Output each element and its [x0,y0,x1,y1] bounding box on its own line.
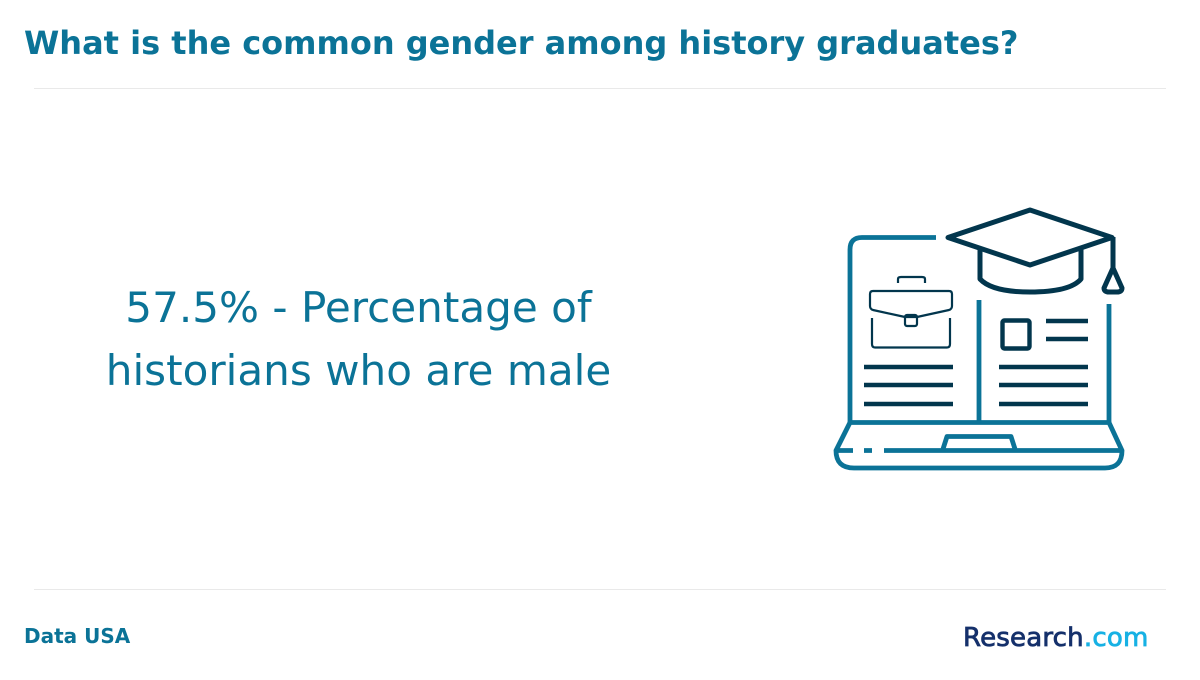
title: What is the common gender among history graduates? [24,24,1018,62]
icon: laptop screen and base [836,238,1122,468]
icon: text lines and photo [864,320,1088,404]
statistic text: 57.5% - Percentage of [125,283,592,332]
icon: laptop with open book and graduation cap [834,208,1124,470]
statistic text: historians who are male [106,346,611,395]
logo: Research.com: Research.com [963,623,1148,653]
icon: briefcase [870,277,952,348]
source label: Data USA [24,624,130,648]
statistic text [106,283,611,395]
icon: graduation cap [948,210,1122,292]
